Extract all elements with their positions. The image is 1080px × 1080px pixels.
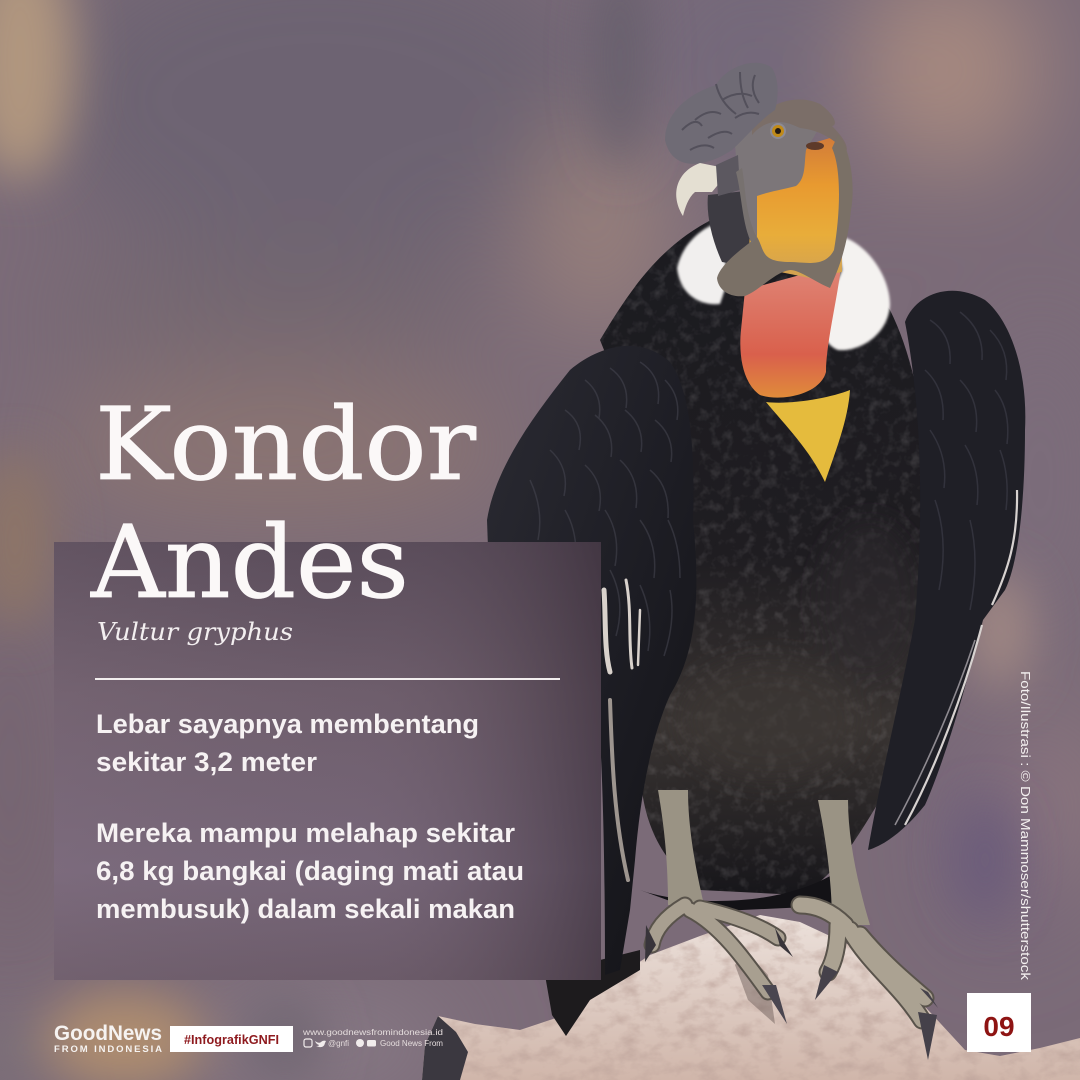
fact: eating: Mereka mampu melahap sekitar <box>96 818 515 848</box>
right wing feather lines <box>925 312 1008 610</box>
rock texture <box>420 910 1080 1080</box>
right wing white streaks <box>895 490 1017 825</box>
right foot <box>800 905 938 1060</box>
text panel <box>54 542 601 980</box>
legs <box>658 790 870 925</box>
logo: GoodNews from Indonesia: FROM INDONESIA <box>54 1044 162 1055</box>
left foot <box>645 905 793 1024</box>
title: Kondor Andes: Kondor <box>95 386 476 503</box>
body <box>600 218 932 895</box>
icon: twitter <box>315 1041 326 1047</box>
left wing <box>487 346 696 975</box>
fact: eating: membusuk) dalam sekali makan <box>96 894 515 924</box>
logo: GoodNews from Indonesia: GoodNews <box>54 1022 162 1045</box>
fact: wingspan <box>96 709 479 777</box>
icon: youtube <box>367 1040 376 1046</box>
website and social handles: Good News From <box>380 1039 443 1048</box>
website and social handles: @gnfi <box>328 1039 349 1048</box>
photo credit: Foto/Ilustrasi : © Don Mammoser/shutterstock <box>1018 671 1033 981</box>
lower body dark folds <box>640 870 850 912</box>
beak <box>676 163 725 216</box>
head and wattle <box>665 63 853 296</box>
right wing <box>868 291 1025 850</box>
eye <box>771 124 785 138</box>
page number box: 09 <box>983 1011 1015 1042</box>
tail feathers <box>545 950 640 1036</box>
website and social handles <box>302 1028 443 1048</box>
fact: eating <box>96 818 524 924</box>
icon: facebook <box>356 1039 364 1047</box>
condor bird <box>487 63 1025 1060</box>
dark throat <box>708 190 760 265</box>
logo: GoodNews from Indonesia <box>54 1022 162 1055</box>
dark rock shadow <box>422 1016 468 1080</box>
rock <box>420 910 1080 1080</box>
white neck collar right <box>822 235 890 350</box>
white neck collar left <box>677 222 728 304</box>
grey face <box>735 115 818 237</box>
page number box <box>967 993 1031 1052</box>
brown frilled wattle edge <box>717 135 853 296</box>
brow hood <box>752 99 847 152</box>
hashtag box: #InfografikGNFI <box>184 1033 279 1047</box>
title: Kondor Andes <box>90 386 476 621</box>
pupil <box>775 128 781 134</box>
foot shadows on rock <box>735 950 775 1024</box>
hanging jowl <box>736 168 757 244</box>
website and social handles: www.goodnewsfromindonesia.id <box>302 1028 443 1037</box>
crest folds <box>682 72 759 150</box>
crest comb <box>665 63 778 164</box>
nostril <box>806 142 824 150</box>
red neck skin <box>740 255 842 398</box>
orange yellow neck <box>748 135 842 278</box>
scientific name: Vultur gryphus <box>97 618 293 646</box>
hashtag box <box>170 1026 293 1052</box>
fact: wingspan: sekitar 3,2 meter <box>96 747 318 777</box>
divider <box>95 678 560 680</box>
fact: eating: 6,8 kg bangkai (daging mati atau <box>96 856 524 886</box>
beak base cere <box>716 155 740 196</box>
yellow chest patch <box>766 390 850 482</box>
belly texture <box>600 220 940 900</box>
icon: instagram <box>304 1039 312 1047</box>
white wing streaks <box>604 580 640 880</box>
title: Kondor Andes: Andes <box>90 504 409 621</box>
fact: wingspan: Lebar sayapnya membentang <box>96 709 479 739</box>
wing feather scallops <box>530 362 680 656</box>
